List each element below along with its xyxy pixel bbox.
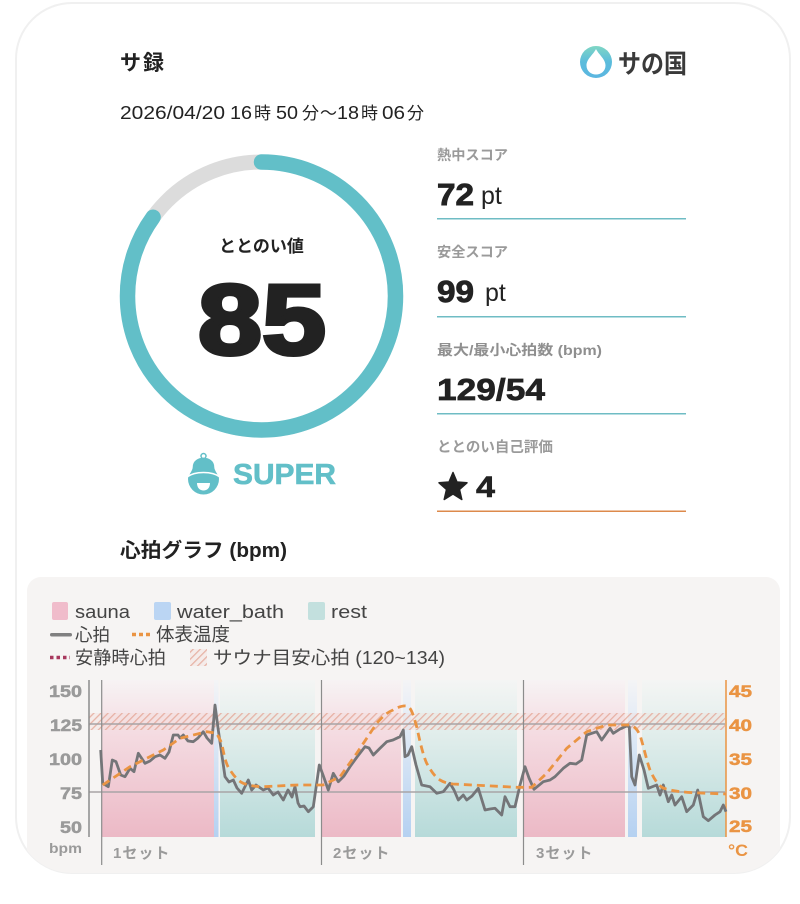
gauge: totonoi value — [128, 162, 396, 430]
icon: water drop — [580, 46, 612, 78]
left axis: 75 — [60, 784, 82, 803]
chart heading: 心拍グラフ (bpm) — [120, 538, 287, 562]
icon: sauna hat face — [187, 454, 220, 494]
sauna target heart rate band — [89, 713, 725, 730]
date and time: 06 — [382, 103, 405, 123]
gauge progress 85 percent — [128, 162, 396, 430]
set dividers and labels: 3セット — [536, 845, 593, 862]
legend: heart rate: 心拍 — [75, 625, 110, 645]
stat: heat score: pt — [481, 182, 502, 210]
left axis — [49, 680, 89, 856]
date and time: 50 — [276, 103, 298, 123]
stat: heat score: 熱中スコア — [437, 147, 508, 164]
date and time: 時 — [361, 104, 378, 123]
right axis: °C — [728, 841, 748, 860]
legend: body surface temperature — [132, 625, 230, 642]
legend: resting heart rate — [50, 648, 164, 666]
date and time: 16 — [230, 103, 252, 123]
stat: safety score — [437, 244, 686, 318]
date and time — [120, 103, 424, 123]
legend: rest: rest — [331, 601, 367, 622]
left axis: 100 — [49, 750, 82, 769]
left axis: bpm — [49, 840, 82, 856]
right axis: 35 — [729, 750, 752, 769]
panel: heart rate chart — [27, 577, 780, 875]
body temperature line — [103, 706, 726, 794]
legend: heart rate — [50, 626, 108, 642]
legend: water bath — [154, 602, 283, 622]
stat: heat score: 72 — [437, 177, 474, 212]
heart rate line — [101, 705, 726, 821]
rating badge: SUPER — [187, 454, 336, 494]
stat: self rating: 4 — [476, 471, 495, 504]
legend: sauna — [52, 602, 130, 620]
legend — [50, 601, 445, 668]
chart phase zones — [102, 680, 726, 837]
right axis: 45 — [729, 682, 752, 701]
set dividers and labels: 2セット — [333, 845, 390, 862]
date and time: 18 — [337, 103, 359, 123]
stat: heat score — [437, 147, 686, 220]
legend: sauna target heart rate: サウナ目安心拍 (120~134) — [213, 648, 445, 668]
stat: max and min heart rate — [437, 342, 686, 414]
legend: sauna: sauna — [75, 601, 131, 622]
set dividers and labels — [102, 680, 593, 865]
legend: water bath: water_bath — [176, 601, 284, 623]
left axis: 50 — [60, 818, 82, 837]
stat: max and min heart rate: 129/54 — [437, 372, 546, 407]
right axis: 30 — [729, 784, 752, 803]
gauge value: 85 — [198, 264, 326, 375]
date and time: 時 — [254, 104, 271, 123]
title: サ録 — [120, 52, 164, 75]
reference lines — [89, 724, 725, 792]
left axis: 125 — [50, 716, 82, 735]
right axis: 40 — [729, 716, 752, 735]
stat: self rating: ととのい自己評価 — [437, 438, 553, 456]
gauge track — [128, 162, 396, 430]
legend: resting heart rate: 安静時心拍 — [75, 648, 166, 668]
right axis — [726, 680, 752, 860]
stat: safety score: pt — [485, 279, 506, 307]
date and time: ～ — [320, 104, 337, 123]
date and time: 2026/04/20 — [120, 103, 225, 123]
right axis: 25 — [729, 817, 752, 836]
date and time: 分 — [302, 104, 319, 123]
date and time: 分 — [407, 104, 424, 123]
logo wordmark: サの国 — [618, 49, 687, 79]
stat: safety score: 99 — [437, 274, 474, 309]
gauge label: ととのい値 — [219, 237, 304, 256]
stat: self rating — [437, 438, 686, 512]
left axis: 150 — [49, 682, 82, 701]
stat: safety score: 安全スコア — [437, 244, 508, 261]
chart background — [27, 577, 780, 875]
rating label: SUPER — [233, 459, 336, 491]
legend: body surface temperature: 体表温度 — [156, 624, 230, 645]
set dividers and labels: 1セット — [113, 845, 170, 862]
legend: rest — [308, 602, 367, 620]
logo: サの国 — [580, 46, 687, 79]
icon: star — [439, 472, 467, 500]
stat: max and min heart rate: 最大/最小心拍数 (bpm) — [437, 342, 602, 359]
